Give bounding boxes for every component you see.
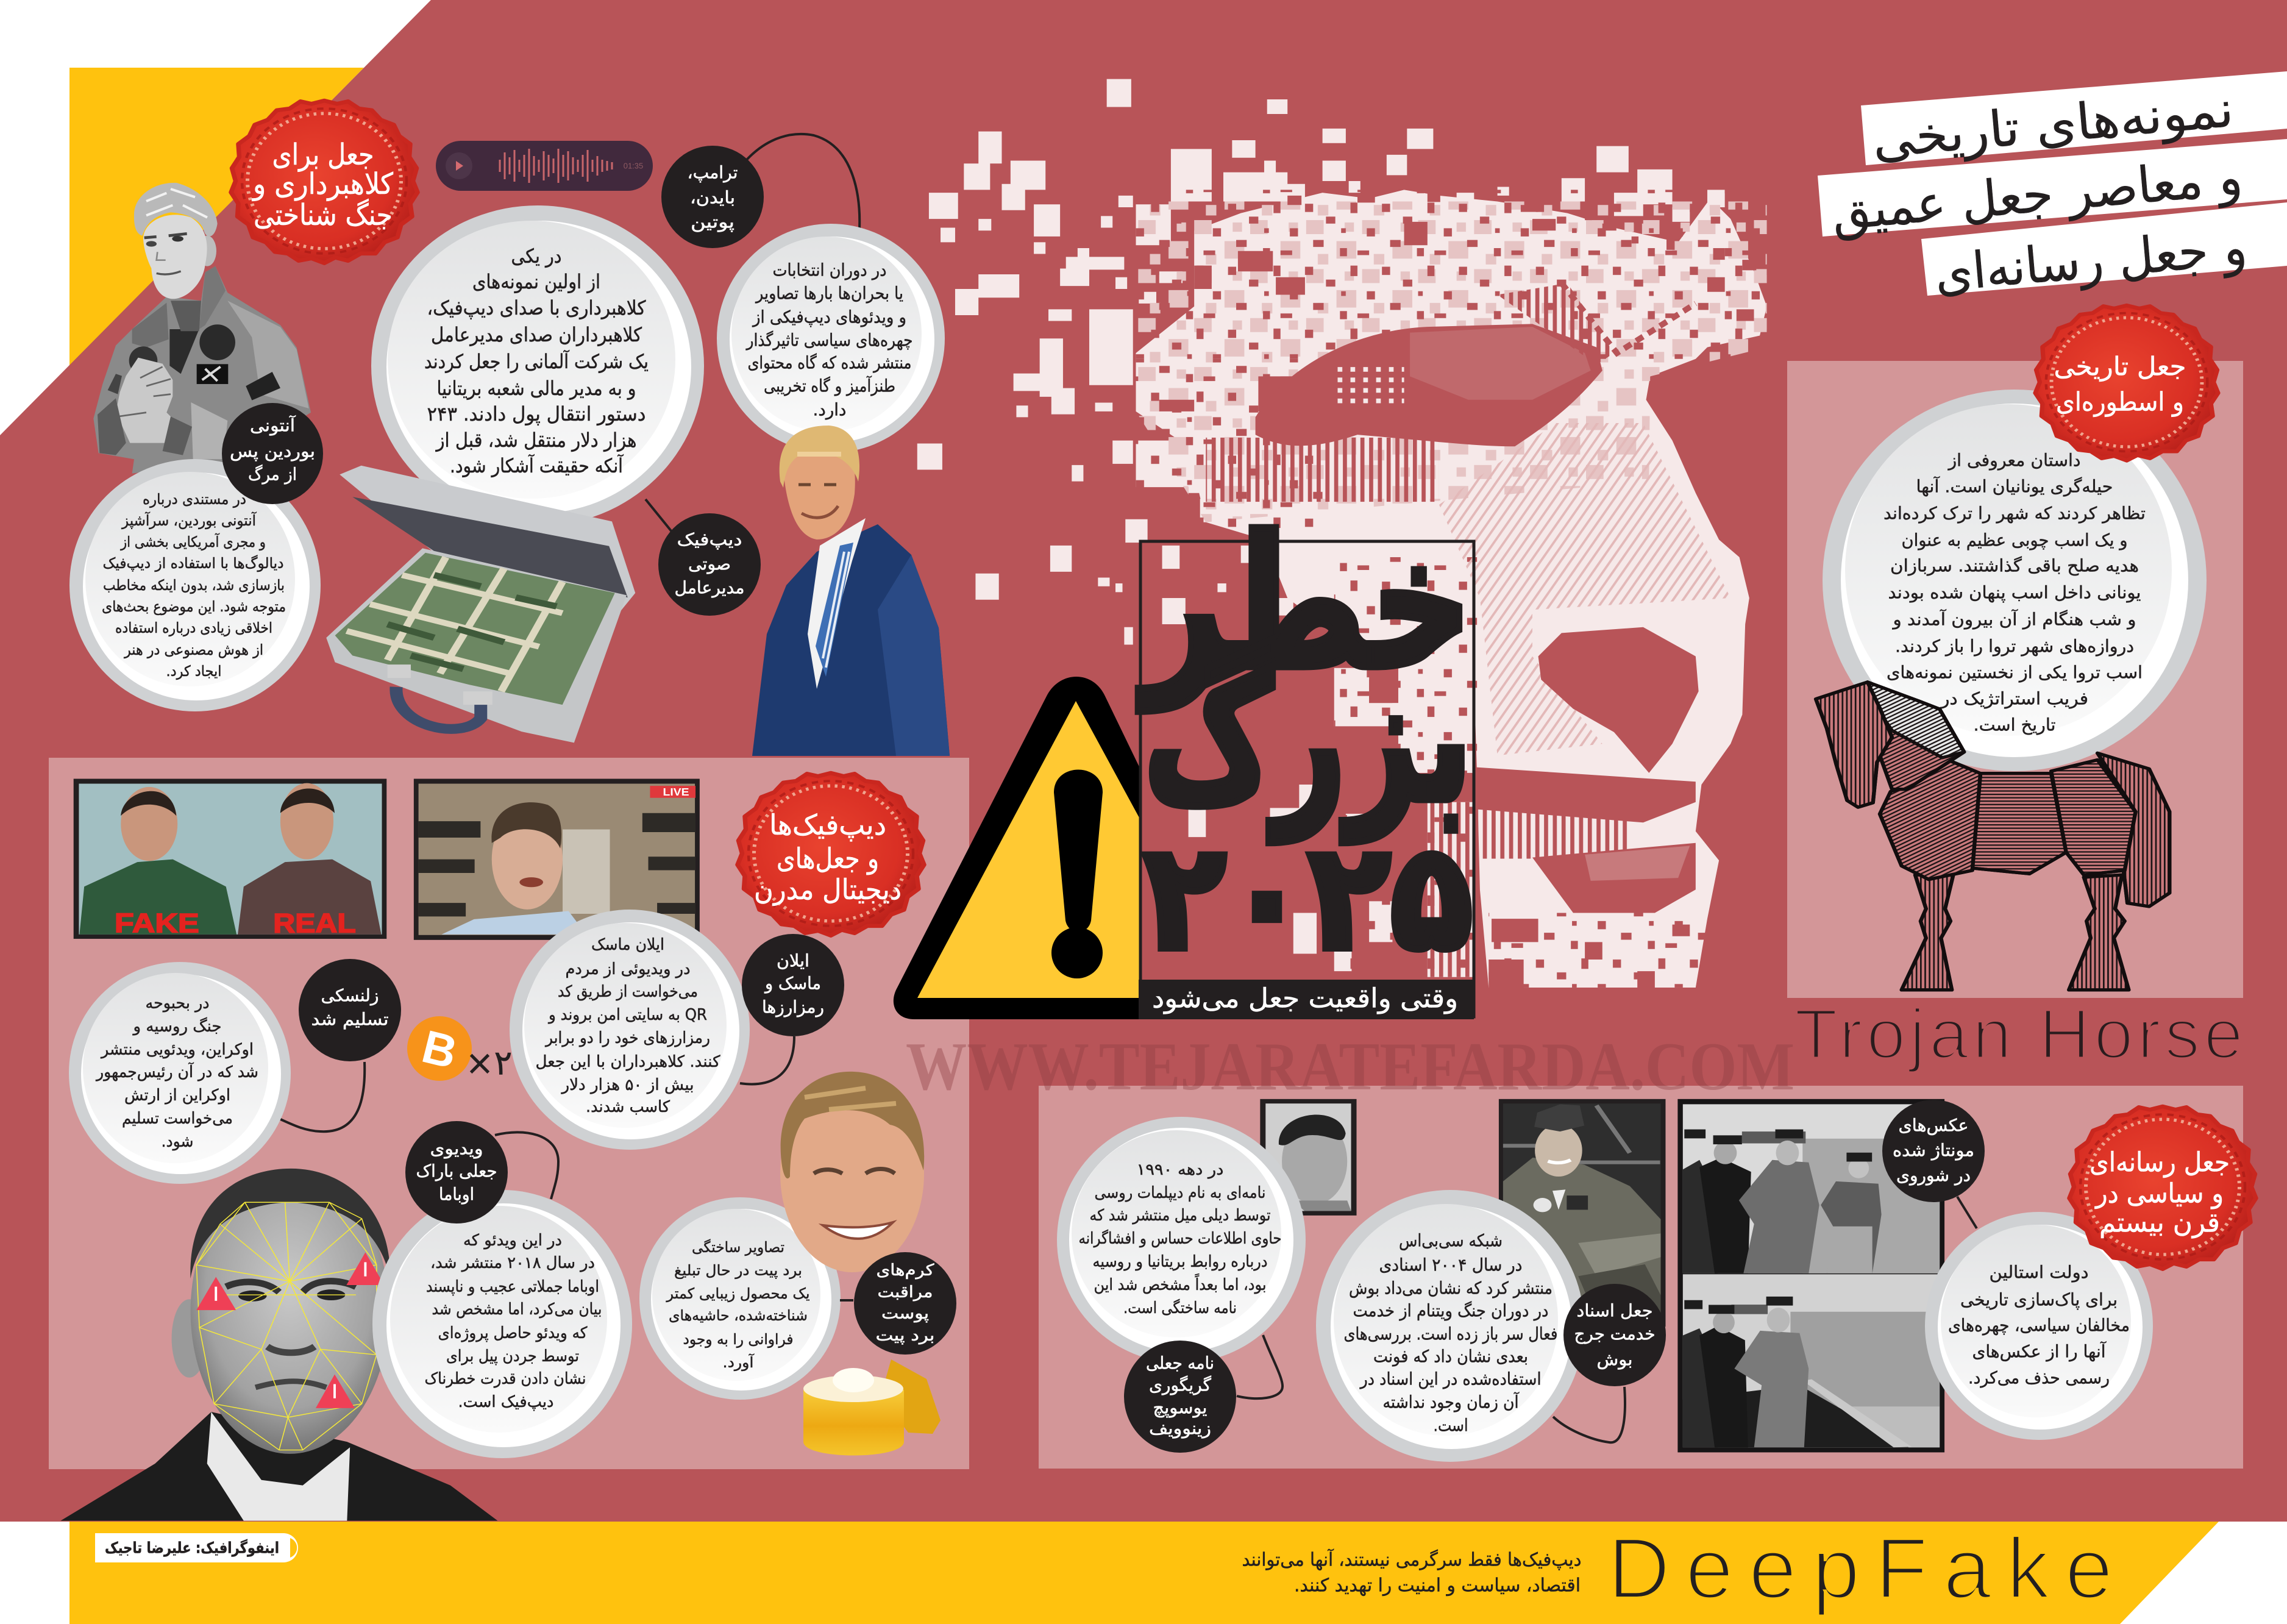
- footer statement: اقتصاد، سیاست و امنیت را تهدید کنند.: [1294, 1575, 1581, 1596]
- label: Zelensky surrendered: تسلیم شد: [311, 1010, 389, 1029]
- connector: Musk label: [740, 1036, 794, 1084]
- lip stripes: [1477, 809, 1629, 859]
- circle: Musk text: می‌خواست از طریق کد: [558, 983, 698, 1001]
- Trojan horse illustration: [1816, 682, 2169, 990]
- label: Trump Biden Putin: پوتین: [691, 212, 734, 232]
- circle: Stalin text: آنها را از عکس‌های: [1972, 1341, 2107, 1362]
- circle: Trojan text: اسب تروا یکی از نخستین نمونه‌های: [1887, 662, 2143, 683]
- seal: deepfakes and modern digital fraud: دیجیتال مدرن: [754, 873, 902, 906]
- footer: [95, 1520, 2113, 1617]
- pixel holes on chin: [1489, 913, 1722, 988]
- watermark: WWW.TEJARATEFARDA.COM: [906, 1029, 1794, 1105]
- label: Pitt skincare: مراقبت: [878, 1283, 933, 1302]
- title band 2: [1818, 139, 2287, 237]
- connector: cream label: [840, 1299, 853, 1302]
- circle: Bush text: آن زمان وجود نداشته: [1382, 1392, 1520, 1412]
- circle: Zelensky text: شود.: [161, 1133, 194, 1151]
- subtitle bar: [1139, 980, 1474, 1019]
- title band 1: [1861, 71, 2287, 165]
- label: Soviet montage photos: در شوروی: [1896, 1166, 1971, 1185]
- circle: Brad Pitt text: تصاویر ساختگی: [692, 1239, 784, 1256]
- circle: Bush text: استفاده‌شده در این اسناد در: [1359, 1369, 1541, 1389]
- circle: Zinoviev letter text: نامه‌ای به نام دیپلمات روسی: [1095, 1184, 1265, 1202]
- big title text: ۲۰۲۵: [1144, 812, 1473, 983]
- dark eye socket: [1256, 324, 1602, 446]
- chin holes: [1489, 919, 1690, 988]
- circle: Brad Pitt text: آورد.: [723, 1353, 755, 1371]
- circle: Trojan text: یونانی داخل اسب پنهان شده بودند: [1888, 583, 2141, 602]
- circle: Musk text: QR به سایتی امن بروند و: [547, 1006, 707, 1024]
- seal: historical and mythical fakes: جعل تاریخی: [2054, 351, 2186, 382]
- circle: Obama text: در سال ۲۰۱۸ منتشر شد،: [430, 1254, 595, 1272]
- circle: Bourdain text: آنتونی بوردین، سرآشپز: [121, 511, 257, 529]
- stripes under eye: [1206, 438, 1439, 502]
- photo: Trump: [752, 426, 950, 756]
- big title text: بزرگ: [1144, 636, 1473, 844]
- label: fake Zinoviev letter: [1124, 1341, 1236, 1453]
- label: Musk and crypto: [742, 934, 844, 1036]
- circle: Stalin text: رسمی حذف می‌کرد.: [1968, 1368, 2110, 1387]
- circle: voice deepfake text: از اولین نمونه‌های: [472, 270, 600, 293]
- icon: bitcoin times two: ×۲: [466, 1044, 512, 1083]
- seal: media and political fakes: [2069, 1106, 2256, 1269]
- circle: Brad Pitt text: فراوانی را به وجود: [683, 1331, 794, 1348]
- label: Musk and crypto: ماسک و: [764, 973, 821, 994]
- circle: Bourdain text: از هوش مصنوعی در هنر: [124, 641, 263, 658]
- label: audio deepfake CEO: دیپ‌فیک: [677, 529, 742, 550]
- circle: Obama text: [372, 1190, 632, 1458]
- photo: Bourdain: [93, 183, 311, 474]
- eyelid stripes: [1410, 327, 1591, 400]
- circle: Stalin text: دولت استالین: [1990, 1262, 2088, 1283]
- photo: Zelensky fake and real: REAL: [273, 908, 356, 938]
- pixel holes upper head: [1136, 190, 1768, 359]
- circle: voice deepfake text: و به مدیر مالی شعبه بریتانیا: [436, 377, 636, 400]
- pixel holes behind title: [1334, 557, 1477, 977]
- circle: voice deepfake text: کلاهبرداران صدای مدیرعامل: [431, 323, 642, 346]
- circle: Bourdain text: [69, 459, 321, 711]
- circle: Obama text: اوباما جملاتی عجیب و ناپسند: [426, 1278, 599, 1296]
- yellow footer band: [69, 1522, 2219, 1624]
- circle: Musk text: بیش از ۵۰ هزار دلار: [560, 1076, 694, 1094]
- label: Zelensky surrendered: زلنسکی: [321, 985, 379, 1006]
- circle: Trojan text: تاریخ است.: [1974, 714, 2055, 735]
- circle: Musk text: در ویدیوئی از مردم: [566, 960, 690, 978]
- credit pill: [95, 1533, 298, 1562]
- circle: Zinoviev letter text: [1057, 1117, 1306, 1363]
- circle: Trojan text: [1823, 390, 2207, 771]
- label: Musk and crypto: رمزارزها: [762, 997, 824, 1017]
- circle: Bourdain text: در مستندی درباره: [143, 491, 246, 508]
- label: fake Zinoviev letter: نامه جعلی: [1146, 1353, 1214, 1373]
- label: Pitt skincare: کرم‌های: [877, 1261, 934, 1280]
- label: fake Zinoviev letter: زینوویف: [1149, 1418, 1211, 1439]
- big title text: [1137, 497, 1473, 983]
- face mesh: [196, 1202, 377, 1450]
- circle: Trojan text: و شب هنگام از آن بیرون آمدند و: [1891, 610, 2136, 629]
- circle: Trojan text: تظاهر کردند که شهر را ترک کرده‌اند: [1883, 504, 2146, 523]
- circle: Brad Pitt text: یک محصول زیبایی کمتر: [666, 1285, 809, 1302]
- circle: election deepfakes text: چهره‌های سیاسی تاثیرگذار: [745, 330, 913, 350]
- circle: Trojan text: دروازه‌های شهر تروا را باز کردند.: [1895, 636, 2134, 656]
- circle: Bush text: بعدی نشان داد که فونت: [1373, 1346, 1528, 1367]
- stripes behind title: [1428, 802, 1477, 977]
- credit pill: اینفوگرافیک: علیرضا تاجیک: [105, 1539, 279, 1557]
- circle: Bourdain text: ایجاد کرد.: [166, 663, 222, 680]
- seal: media and political fakes: جعل رسانه‌ای: [2090, 1147, 2230, 1178]
- photo: Zinoviev: [1260, 1099, 1357, 1216]
- circle: Obama text: بیان می‌کرد، اما مشخص شد: [432, 1300, 602, 1319]
- pixelated face illustration: [917, 79, 1768, 988]
- circle: Zinoviev letter text: توسط دیلی میل منتشر شد که: [1090, 1206, 1270, 1225]
- circle: Bush text: فعال سر باز زده است. بررسی‌های: [1343, 1324, 1558, 1344]
- section: historical: [1816, 305, 2218, 990]
- label: fake George Bush documents: بوش: [1597, 1350, 1632, 1369]
- title text line 3: و جعل رسانه‌ای: [1932, 218, 2249, 304]
- circle: election deepfakes text: دارد.: [813, 400, 846, 419]
- label: audio deepfake CEO: مدیرعامل: [674, 578, 745, 597]
- photo: Stalin montage: [1677, 1099, 1944, 1452]
- circle: Bush text: منتشر کرد که نشان می‌داد بوش: [1349, 1278, 1553, 1298]
- panel: modern digital: [49, 758, 969, 1469]
- circle: Musk text: [510, 910, 750, 1150]
- seal: fraud and cognitive war: [231, 101, 418, 263]
- seal: media and political fakes: و سیاسی در: [2094, 1178, 2224, 1209]
- label: Trump Biden Putin: [661, 146, 764, 248]
- connector: Zinoviev label: [1237, 1335, 1282, 1398]
- circle: voice deepfake text: هزار دلار منتقل شد، قبل از: [435, 429, 636, 452]
- seal: fraud and cognitive war: جنگ شناختی: [254, 198, 393, 232]
- label: fake Zinoviev letter: یوسوپچ: [1153, 1397, 1207, 1418]
- panel: twentieth century: [1039, 1086, 2243, 1469]
- seal: deepfakes and modern digital fraud: و جعل‌های: [777, 842, 879, 875]
- circle: Zelensky text: جنگ روسیه و: [132, 1017, 222, 1036]
- circle: election deepfakes text: طنزآمیز و گاه تخریبی: [764, 376, 895, 396]
- connector: Bush label: [1553, 1387, 1625, 1442]
- circle: Trojan text: هدیه صلح باقی گذاشتند. سربازان: [1890, 556, 2139, 575]
- circle: Bourdain text: دیالوگ‌ها با استفاده از دیپ‌فیک: [102, 555, 284, 572]
- circle: Zelensky text: اوکراین، ویدئویی منتشر: [100, 1041, 254, 1059]
- circle: Zelensky text: [69, 962, 291, 1184]
- circle: voice deepfake text: دستور انتقال پول دادند. ۲۴۳: [427, 402, 646, 426]
- label: fake George Bush documents: [1563, 1284, 1666, 1386]
- connector: audio label: [646, 499, 672, 532]
- circle: voice deepfake text: [371, 205, 704, 526]
- circle: Obama text: توسط جردن پیل برای: [446, 1347, 579, 1366]
- seal: fraud and cognitive war: کلاهبرداری و: [252, 167, 393, 201]
- light tile texture: [1136, 201, 1767, 522]
- photo: Zelensky fake and real: [74, 779, 386, 939]
- icon: bitcoin times two: B: [417, 1020, 462, 1079]
- circle: voice deepfake text: کلاهبرداری با صدای دیپ‌فیک،: [427, 296, 646, 319]
- circle: Zinoviev letter text: حاوی اطلاعات حساس و افشاگرانه: [1079, 1229, 1281, 1248]
- alert triangle left: [196, 1277, 236, 1310]
- circle: Bush text: [1316, 1190, 1584, 1462]
- circle: Musk text: کنند. کلاهبرداران با این جعل: [535, 1053, 720, 1071]
- circle: Trojan text: و یک اسب چوبی عظیم به عنوان: [1902, 530, 2127, 550]
- section: twentieth century media fakes: [1057, 1099, 2256, 1462]
- photo: Elon Musk live: LIVE: [663, 786, 689, 798]
- photo: Bush: [1499, 1099, 1665, 1327]
- circle: Zelensky text: می‌خواست تسلیم: [122, 1109, 233, 1128]
- label: Pitt skincare: [854, 1252, 956, 1355]
- photo: Obama with face mesh: [60, 1169, 497, 1521]
- subtitle bar: وقتی واقعیت جعل می‌شود: [1152, 983, 1458, 1014]
- title text line 1: نمونه‌های تاریخی: [1870, 80, 2236, 169]
- circle: Bourdain text: بازسازی شد، بدون اینکه مخاطب: [103, 577, 285, 594]
- circle: Trojan text: داستان معروفی از: [1947, 450, 2081, 471]
- connector: Zelensky label: [280, 1062, 365, 1131]
- footer statement: دیپ‌فیک‌ها فقط سرگرمی نیستند، آنها می‌توانند: [1242, 1548, 1581, 1570]
- label: Zelensky surrendered: [299, 959, 401, 1061]
- circle: Bush text: در دوران جنگ ویتنام از خدمت: [1353, 1301, 1548, 1320]
- circle: Brad Pitt text: برد پیت در حال تبلیغ: [674, 1262, 802, 1279]
- lip highlight: [1585, 846, 1690, 881]
- circle: Bourdain text: اخلاقی زیادی درباره استفاده: [115, 619, 272, 636]
- circle: Bourdain text: و مجری آمریکایی بخشی از: [120, 533, 266, 550]
- title frame: [1140, 541, 1474, 1017]
- warning triangle: [894, 677, 1140, 1019]
- alert triangle bottom: [316, 1374, 355, 1408]
- photo: Zelensky fake and real: FAKE: [115, 908, 199, 938]
- circle: Obama text: دیپ‌فیک است.: [458, 1393, 553, 1411]
- label: fake George Bush documents: خدمت جرج: [1574, 1324, 1656, 1345]
- photo: Elon Musk live: [414, 779, 700, 940]
- big title text: خطر: [1137, 497, 1473, 712]
- circle: Zelensky text: اوکراین از ارتش: [124, 1086, 230, 1105]
- brow stripes: [1498, 283, 1614, 365]
- lower lip shadow: [1532, 843, 1696, 913]
- nostril shape: [1538, 627, 1699, 773]
- panel: historical: [1787, 361, 2243, 998]
- circle: Trojan text: فریب استراتژیک در: [1940, 689, 2088, 708]
- circle: election deepfakes text: در دوران انتخابات: [773, 260, 886, 280]
- circle: Stalin text: [1925, 1212, 2153, 1440]
- label: Trump Biden Putin: بایدن،: [690, 188, 735, 207]
- circle: voice deepfake text: یک شرکت آلمانی را جعل کردند: [424, 349, 649, 373]
- circle: Stalin text: مخالفان سیاسی، چهره‌های: [1948, 1316, 2130, 1335]
- label: Bourdain after death: [222, 403, 323, 504]
- diagonal brow cut: [1562, 283, 1696, 353]
- label: fake Obama video: اوباما: [439, 1184, 474, 1205]
- title band 3: [1921, 202, 2287, 296]
- circle: election deepfakes text: منتشر شده که گاه محتوای: [747, 352, 912, 373]
- circle: Obama text: نشان دادن قدرت خطرناک: [424, 1370, 586, 1388]
- circle: election deepfakes text: و ویدئوهای دیپ‌فیکی از: [752, 307, 906, 327]
- circle: Brad Pitt text: [639, 1197, 841, 1400]
- seal: media and political fakes: قرن بیستم: [2099, 1207, 2220, 1239]
- audio player: [436, 141, 653, 191]
- trojan horse heading: Trojan Horse: [1794, 994, 2243, 1074]
- circle: Zinoviev letter text: نامه ساختگی است.: [1123, 1298, 1237, 1317]
- label: fake George Bush documents: جعل اسناد: [1576, 1301, 1653, 1320]
- mouth band: [1474, 767, 1696, 822]
- circle: voice deepfake text: در یکی: [511, 244, 562, 268]
- circle: Zinoviev letter text: بود، اما بعداً مشخص شد این: [1094, 1273, 1267, 1294]
- connector: election label: [747, 134, 859, 229]
- seal: deepfakes and modern digital fraud: دیپ‌فیک‌ها: [769, 808, 886, 841]
- label: Pitt skincare: برد پیت: [875, 1327, 935, 1345]
- circle: Trojan text: حیله‌گری یونانیان است. آنها: [1916, 477, 2113, 496]
- label: Musk and crypto: ایلان: [777, 951, 809, 970]
- label: Soviet montage photos: عکس‌های: [1898, 1116, 1969, 1135]
- face holes: [1159, 193, 1756, 703]
- circle: Zelensky text: شد که در آن رئیس‌جمهور: [95, 1062, 258, 1081]
- label: fake Obama video: [405, 1121, 508, 1223]
- circle: Obama text: در این ویدئو که: [463, 1231, 562, 1250]
- title text line 2: و معاصر جعل عمیق: [1830, 148, 2244, 242]
- label: Trump Biden Putin: ترامپ،: [688, 162, 738, 183]
- circle: Zinoviev letter text: درباره روابط بریتانیا و روسیه: [1092, 1253, 1268, 1271]
- seal: fraud and cognitive war: جعل برای: [272, 138, 374, 172]
- main title block: [894, 497, 1474, 1019]
- circle: Musk text: کاسب شدند.: [586, 1098, 670, 1116]
- circle: Musk text: ایلان ماسک: [591, 936, 664, 954]
- label: fake Zinoviev letter: گریگوری: [1149, 1375, 1212, 1395]
- label: fake Obama video: ویدیوی: [430, 1139, 483, 1158]
- circle: Brad Pitt text: شناخته‌شده، حاشیه‌های: [669, 1307, 808, 1324]
- seal: historical and mythical fakes: [2035, 305, 2218, 461]
- circle: Stalin text: برای پاک‌سازی تاریخی: [1960, 1290, 2118, 1309]
- label: audio deepfake CEO: [658, 513, 761, 616]
- label: Bourdain after death: آنتونی: [250, 416, 296, 435]
- circle: Zinoviev letter text: در دهه ۱۹۹۰: [1136, 1161, 1224, 1179]
- circle: Obama text: که ویدئو حاصل پروژه‌ای: [438, 1324, 588, 1342]
- circle: voice deepfake text: آنکه حقیقت آشکار شود.: [450, 454, 624, 477]
- eye flecks: [1334, 365, 1404, 405]
- icon: cream jar: [803, 1359, 941, 1456]
- circle: election deepfakes text: یا بحران‌ها بارها تصاویر: [755, 283, 903, 304]
- label: audio deepfake CEO: صوتی: [688, 554, 731, 574]
- label: Pitt skincare: پوست: [881, 1305, 929, 1323]
- circle: Zelensky text: در بحبوحه: [145, 994, 210, 1013]
- pixel holes left side: [1136, 359, 1323, 528]
- alert triangle right: [346, 1252, 384, 1285]
- circle: Bush text: شبکه سی‌بی‌اس: [1399, 1230, 1503, 1251]
- title banner: [1818, 71, 2287, 304]
- DeepFake heading: DeepFake: [1608, 1520, 2113, 1617]
- connector: Obama label: [495, 1132, 558, 1199]
- icon: bitcoin times two: [407, 1016, 512, 1083]
- seal: historical and mythical fakes: و اسطوره‌ای: [2056, 386, 2184, 417]
- label: fake Obama video: جعلی باراک: [416, 1161, 497, 1181]
- section: voice fraud: [69, 101, 950, 756]
- seal: deepfakes and modern digital fraud: [738, 773, 924, 936]
- audio player: 01:35: [624, 161, 643, 171]
- label: Bourdain after death: از مرگ: [248, 465, 297, 484]
- circle: Bush text: در سال ۲۰۰۴ اسنادی: [1379, 1255, 1523, 1275]
- yellow corner top left: [69, 68, 364, 366]
- circle: Bush text: است.: [1434, 1416, 1468, 1435]
- photo: Brad Pitt face: [780, 1072, 924, 1272]
- cheek ribs: [1439, 423, 1730, 755]
- footer statement: [1242, 1548, 1581, 1596]
- circle: election deepfakes text: [717, 224, 945, 453]
- briefcase of money: [326, 466, 635, 743]
- circle: Musk text: رمزارزهای خود را دو برابر: [544, 1029, 710, 1047]
- circle: Bourdain text: متوجه شود. این موضوع بحث‌های: [102, 598, 286, 615]
- section: modern digital: [60, 773, 956, 1521]
- label: Bourdain after death: بوردین پس: [230, 441, 315, 461]
- connector: montage label: [1957, 1197, 1977, 1228]
- label: Soviet montage photos: مونتاژ شده: [1893, 1140, 1974, 1161]
- label: Soviet montage photos: [1882, 1100, 1985, 1202]
